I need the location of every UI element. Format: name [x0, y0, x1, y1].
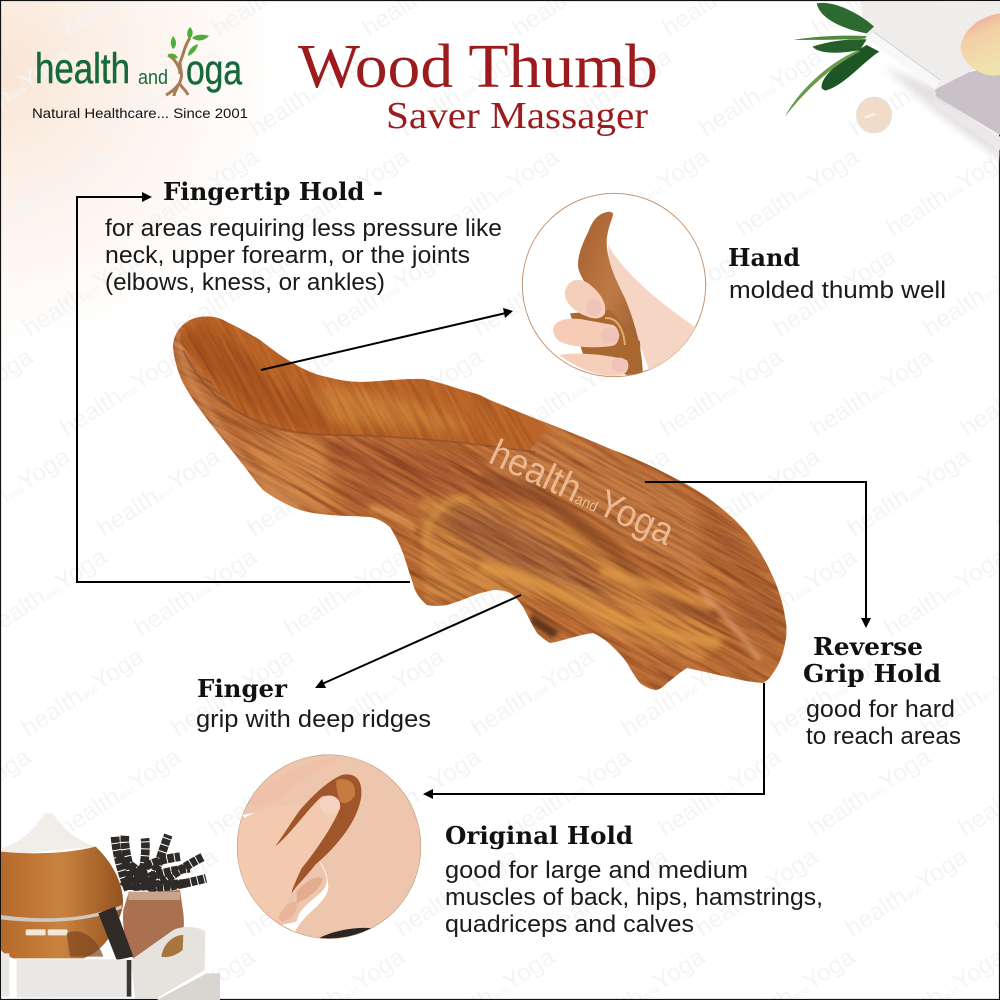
shadow: [883, 67, 1000, 160]
thumb and wrist: [608, 245, 697, 373]
thumbnail: [320, 796, 340, 814]
logo: health and Yoga: [35, 27, 243, 96]
dark channel: [480, 477, 720, 617]
heading: Fingertip Hold: Fingertip Hold -: [163, 177, 383, 206]
heading: Reverse Grip Hold: [803, 632, 941, 688]
photo: massager on back: [235, 755, 425, 942]
decoration: towels, flower, leaves, candle: [785, 1, 1000, 160]
photo: hand gripping massager: [522, 193, 706, 377]
edge light: [180, 335, 300, 508]
text: Fingertip Hold description: neck, upper forearm, or the joints: [105, 242, 470, 269]
text: Reverse Grip description: good for hard: [806, 696, 955, 723]
arrow: to Reverse Grip Hold: [645, 482, 871, 628]
text: Original Hold description: muscles of back, hips, hamstrings,: [445, 884, 823, 911]
bowl rim: [183, 350, 535, 452]
wood grain: [173, 316, 786, 690]
diffuser: [1, 813, 97, 855]
text: Finger description: grip with deep ridges: [196, 706, 431, 733]
white towel: [860, 1, 1000, 89]
leaves: [817, 3, 874, 33]
ground: [157, 973, 220, 1000]
text: Reverse Grip description: [806, 696, 961, 750]
yellow arc: [427, 497, 470, 545]
heading: Reverse Grip Hold: Reverse: [813, 632, 923, 661]
crate: [1, 953, 126, 997]
grey towel: [935, 65, 1000, 135]
candle: [857, 97, 891, 133]
arrow: to Hand photo: [261, 308, 513, 370]
tonal regions: [243, 433, 330, 515]
arrow: to Fingertip Hold: [77, 192, 410, 582]
bowl interior: [180, 316, 548, 450]
title: Saver Massager: [386, 95, 648, 137]
massager: [273, 774, 361, 893]
wood piece: [578, 212, 643, 375]
title: [298, 33, 658, 137]
text: Hand description: molded thumb well: [729, 277, 946, 304]
text: Fingertip Hold description: (elbows, kness, or ankles): [105, 269, 385, 296]
main product: wood massager: [173, 316, 786, 690]
dark knot: [530, 613, 560, 638]
arrow: to Finger: [315, 595, 521, 688]
logo: health and Yoga: health: [35, 45, 130, 93]
logo tagline: Natural Healthcare... Since 2001: [32, 105, 248, 121]
plant: [115, 835, 206, 890]
hand: [238, 796, 340, 920]
text: Original Hold description: [445, 857, 823, 938]
logo: health and Yoga: oga: [186, 46, 243, 93]
text: Fingertip Hold description: for areas requiring less pressure like: [105, 215, 502, 242]
heading: Finger: Finger: [197, 674, 287, 703]
heading: Hand: Hand: [728, 243, 800, 272]
body skin: [235, 755, 425, 942]
title: Wood Thumb: [298, 33, 658, 101]
arrow: to Original Hold: [423, 683, 764, 799]
decoration: diffuser, plant, jar, crate: [1, 813, 220, 1000]
text: Fingertip Hold description: [105, 215, 502, 296]
tail highlight: [700, 590, 760, 660]
fingernails: [586, 299, 602, 316]
icon: tree: [166, 27, 209, 96]
flower: [961, 13, 1000, 76]
gap white: [242, 812, 255, 818]
fingers: [565, 280, 605, 318]
light flank: [600, 572, 713, 607]
text: Original Hold description: quadriceps and calves: [445, 911, 694, 938]
heading: Reverse Grip Hold: Grip Hold: [803, 659, 941, 688]
cable: [98, 907, 133, 960]
dark strap: [320, 928, 371, 938]
text: Original Hold description: good for large and medium: [445, 857, 748, 884]
jar: [123, 890, 184, 963]
logo: health and Yoga: and: [138, 67, 168, 89]
engraved logo on wood: healthandYoga: [483, 432, 681, 554]
lower wood: [570, 310, 642, 375]
heading: Original Hold: Original Hold: [445, 821, 633, 850]
text: Reverse Grip description: to reach areas: [806, 723, 961, 750]
